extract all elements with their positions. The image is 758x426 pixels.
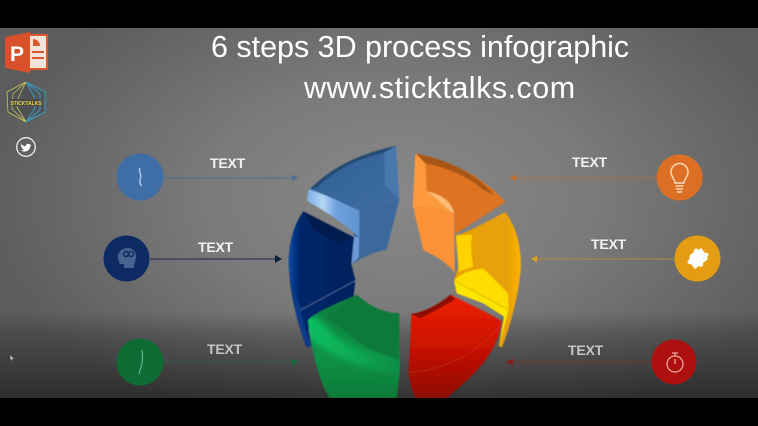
panel: step 1 blue callout bbox=[116, 154, 298, 200]
title: 6 steps 3D process infographic bbox=[211, 30, 629, 64]
label: navy: TEXT bbox=[198, 239, 233, 255]
icon: PowerPoint logo: P bbox=[10, 43, 24, 66]
icon: navy circle head bbox=[104, 236, 150, 282]
arrow: green bbox=[164, 358, 298, 366]
arrow: navy bbox=[150, 255, 282, 263]
arrow: blue bbox=[164, 174, 298, 182]
icon: orange circle bulb bbox=[656, 154, 702, 200]
segment: orange bbox=[413, 153, 505, 273]
segment: steel blue bbox=[307, 146, 399, 264]
panel: step 3 green callout bbox=[116, 338, 298, 386]
icon: blue circle bbox=[116, 154, 164, 200]
segment: navy bbox=[289, 211, 355, 347]
arrow: orange bbox=[510, 174, 656, 182]
website url: www.sticktalks.com bbox=[304, 71, 576, 105]
label: green: TEXT bbox=[207, 341, 242, 357]
icon: twitter bbox=[16, 137, 36, 157]
label: blue: TEXT bbox=[210, 155, 245, 171]
arrow: yellow bbox=[531, 256, 674, 262]
segment: red bbox=[409, 295, 502, 398]
icon: sticktalks logo bbox=[6, 82, 46, 122]
chart: 3D six-segment ring bbox=[288, 146, 522, 398]
icon: green circle bbox=[116, 338, 164, 386]
icon: PowerPoint logo bbox=[5, 32, 48, 73]
label: orange: TEXT bbox=[572, 154, 607, 170]
icon: amber circle puzzle bbox=[674, 236, 720, 282]
panel: step 6 red callout bbox=[506, 340, 696, 384]
icon: mouse cursor bbox=[10, 355, 14, 361]
icon: sticktalks logo: STICKTALKS bbox=[10, 101, 42, 107]
segment: green bbox=[303, 295, 402, 398]
icon: red circle stopwatch bbox=[652, 340, 696, 384]
label: red: TEXT bbox=[568, 342, 603, 358]
label: yellow: TEXT bbox=[591, 236, 626, 252]
panel: step 2 navy callout bbox=[104, 236, 282, 282]
arrow: red bbox=[506, 358, 651, 366]
panel: step 4 orange callout bbox=[510, 154, 702, 200]
panel: step 5 yellow callout bbox=[531, 236, 720, 282]
segment: yellow bbox=[454, 212, 521, 347]
